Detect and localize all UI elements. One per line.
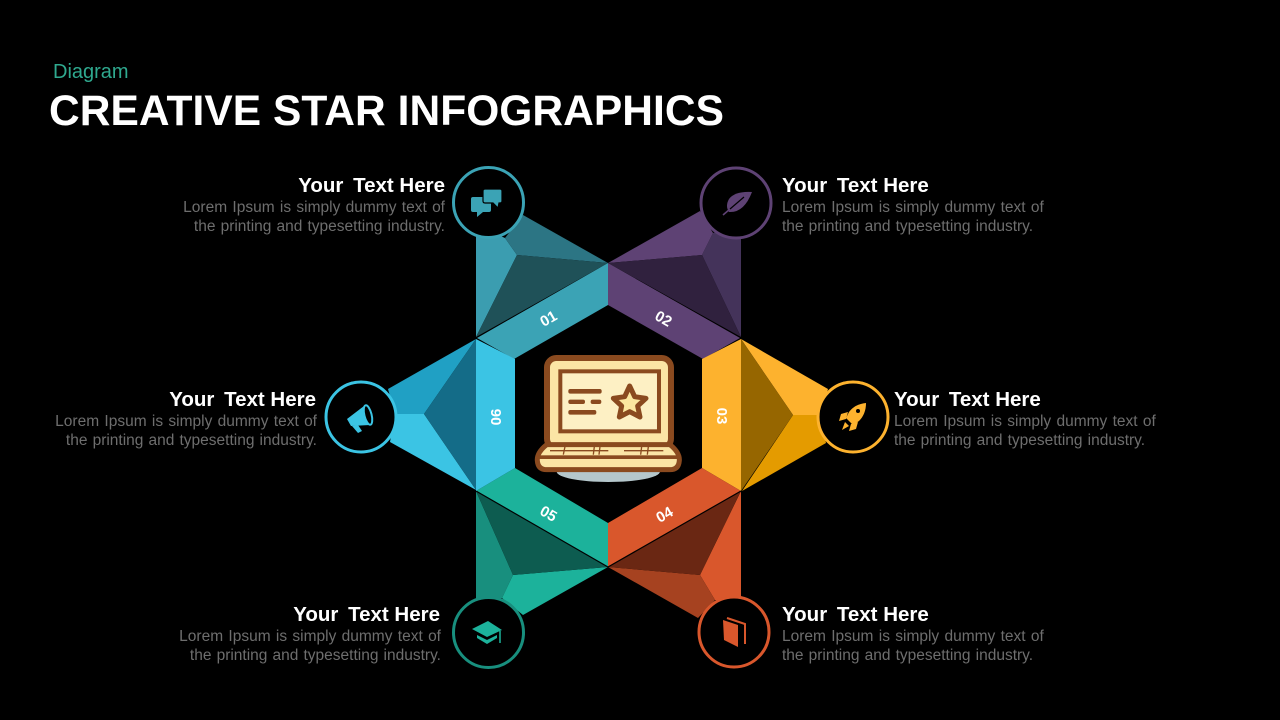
text block 01 <box>183 174 446 235</box>
text block 06: Your Text Here <box>169 388 316 411</box>
spike 02 <box>608 211 741 337</box>
text block 04: Lorem Ipsum is simply dummy text of <box>782 628 1045 645</box>
text block 04 <box>782 603 1045 664</box>
text block 02: the printing and typesetting industry. <box>782 218 1033 235</box>
text block 05: Your Text Here <box>293 603 440 626</box>
text block 01: Lorem Ipsum is simply dummy text of <box>183 199 446 216</box>
title: CREATIVE STAR INFOGRAPHICS <box>49 88 724 135</box>
segment 04: 04 <box>653 503 677 527</box>
text block 02 <box>782 174 1045 235</box>
icon: laptop <box>537 358 679 482</box>
text block 06: Lorem Ipsum is simply dummy text of <box>55 413 318 430</box>
segment 01: 01 <box>537 308 560 331</box>
segment 05 <box>476 468 608 567</box>
text block 03: Your Text Here <box>894 388 1041 411</box>
icon circle 06: megaphone <box>326 382 396 452</box>
icon circle 01: chat <box>454 168 524 238</box>
icon circle 05: graduation cap <box>454 598 524 668</box>
spike 01 <box>476 215 608 337</box>
text block 05: the printing and typesetting industry. <box>190 647 441 664</box>
text block 03: Lorem Ipsum is simply dummy text of <box>894 413 1157 430</box>
text block 03 <box>894 388 1157 449</box>
icon circle 04: book <box>699 597 769 667</box>
text block 03: the printing and typesetting industry. <box>894 432 1145 449</box>
segment 03 <box>702 339 741 491</box>
text block 01: Your Text Here <box>298 174 445 197</box>
segment 03: 03 <box>713 408 730 424</box>
text block 06 <box>55 388 318 449</box>
segment 04 <box>608 468 741 567</box>
segment 02 <box>608 263 740 359</box>
text block 05: Lorem Ipsum is simply dummy text of <box>179 628 442 645</box>
text block 01: the printing and typesetting industry. <box>194 218 445 235</box>
icon circle 02: leaf <box>701 168 771 238</box>
spike 03 <box>741 339 828 491</box>
spike 06 <box>388 339 476 490</box>
text block 02: Lorem Ipsum is simply dummy text of <box>782 199 1045 216</box>
spike 05 <box>476 491 608 615</box>
spike 04 <box>608 491 741 618</box>
text block 02: Your Text Here <box>782 174 929 197</box>
text block 04: the printing and typesetting industry. <box>782 647 1033 664</box>
segment 02: 02 <box>652 308 675 331</box>
segment 01 <box>477 263 608 359</box>
text block 05 <box>179 603 442 664</box>
text block 04: Your Text Here <box>782 603 929 626</box>
subtitle: Diagram <box>53 61 129 83</box>
text block 06: the printing and typesetting industry. <box>66 432 317 449</box>
segment 05: 05 <box>537 503 560 526</box>
segment 06 <box>476 339 515 491</box>
icon circle 03: rocket <box>818 382 888 452</box>
segment 06: 06 <box>488 409 505 425</box>
